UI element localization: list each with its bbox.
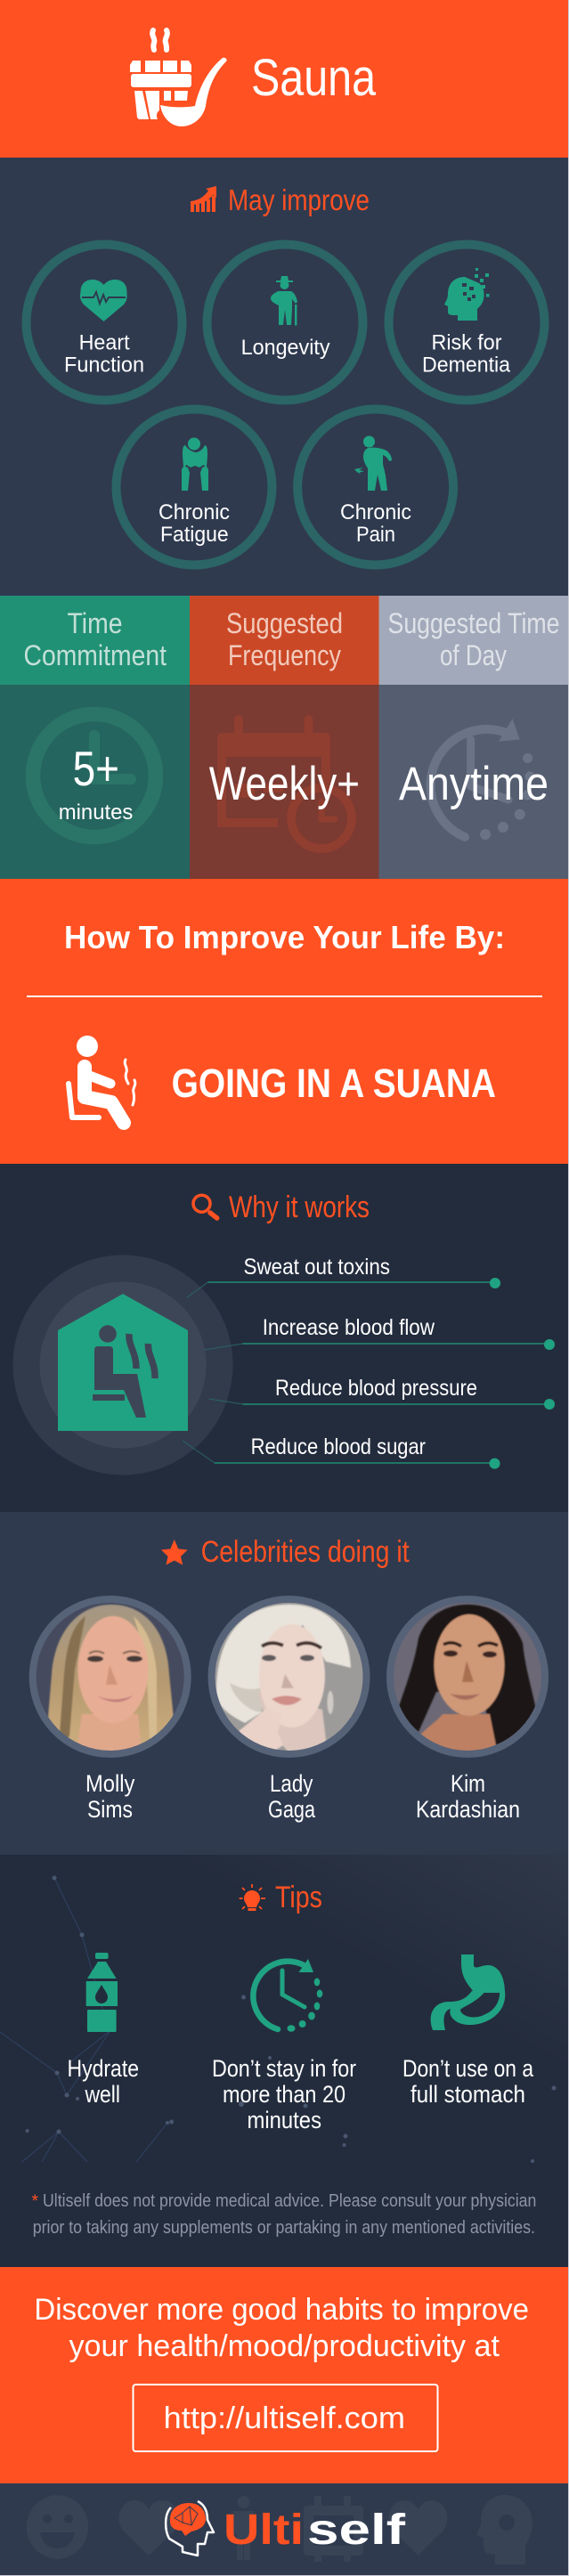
icon: light bulb [240, 1884, 265, 1911]
callout: reduce blood sugar: Reduce blood sugar [251, 1434, 426, 1459]
portrait: kim kardashian [390, 1599, 545, 1759]
panel: footer [0, 2483, 568, 2575]
panel: how to improve [0, 879, 568, 1164]
icon: man in pain [354, 436, 392, 491]
panel: suggested time of day: Anytime [399, 758, 549, 810]
logo: ultiself: Ulti [224, 2507, 304, 2554]
icon: head dissolving [444, 268, 490, 321]
icon: star [161, 1540, 188, 1565]
benefit: heart function: Function [64, 353, 144, 378]
tip: full stomach: full stomach [410, 2081, 525, 2108]
panel: suggested frequency [190, 596, 379, 879]
callout: sweat out toxins: Sweat out toxins [244, 1255, 390, 1280]
benefit: risk for dementia [388, 244, 545, 401]
logo: ultiself [166, 2501, 406, 2556]
panel: time commitment: Time [68, 607, 123, 639]
icon: sauna bucket and ladle [130, 30, 227, 126]
heading: how to improve your life by: How To Improve Your Life By: [64, 919, 505, 955]
heading: may improve: May improve [228, 183, 370, 216]
callout: increase blood flow: Increase blood flow [263, 1315, 435, 1340]
label: lady gaga: Lady [270, 1770, 313, 1797]
label: molly sims: Sims [87, 1796, 133, 1823]
tip: hydrate well: Hydrate [68, 2055, 139, 2082]
benefit: chronic fatigue [116, 410, 272, 565]
panel: header [0, 0, 568, 158]
diagram: sauna house [12, 1255, 233, 1475]
callout: sweat out toxins [187, 1255, 500, 1297]
callout: reduce blood sugar [183, 1434, 500, 1469]
tip: full stomach [402, 1954, 534, 2108]
title: Sauna [251, 49, 377, 107]
panel: suggested time of day: of Day [440, 639, 507, 671]
tip: hydrate well [68, 1953, 139, 2108]
panel: time commitment: minutes [59, 800, 133, 825]
panel: may improve [0, 158, 568, 597]
icon: rising chart [191, 186, 216, 212]
benefit: chronic fatigue: Fatigue [160, 523, 229, 547]
tip: hydrate well: well [85, 2081, 120, 2108]
icon: clock with arrow watermark [430, 719, 534, 840]
disclaimer [32, 2191, 536, 2238]
icon: person sitting in sauna [69, 1036, 135, 1123]
label: kim kardashian: Kardashian [416, 1796, 520, 1823]
tip: time limit [212, 1959, 356, 2133]
benefit: risk for dementia: Risk for [431, 331, 502, 354]
portrait: molly sims [33, 1599, 188, 1763]
button: url [134, 2385, 438, 2451]
icon: old man with cane [271, 276, 297, 326]
panel: suggested time of day [379, 596, 568, 879]
benefit: chronic pain: Pain [356, 523, 395, 547]
panel: time commitment [0, 596, 190, 879]
text: discover more [34, 2293, 529, 2363]
watermark icons [27, 2495, 532, 2564]
heading: celebrities doing it: Celebrities doing it [201, 1535, 410, 1569]
benefit: chronic pain [297, 410, 453, 565]
text: discover more: Discover more good habits to improve [34, 2293, 529, 2327]
icon: calendar watermark [217, 719, 352, 849]
icon: clock watermark [33, 714, 156, 837]
callout: increase blood flow [204, 1315, 555, 1350]
benefit: heart function [27, 244, 182, 401]
icon: clock [253, 1959, 322, 2032]
benefit: risk for dementia: Dementia [422, 353, 511, 378]
tip: time limit: Don’t stay in for [212, 2055, 356, 2082]
panel: suggested frequency: Suggested [226, 607, 343, 639]
tip: full stomach: Don’t use on a [402, 2055, 534, 2082]
text: discover more: your health/mood/productivity at [69, 2329, 500, 2363]
label: lady gaga: Gaga [268, 1796, 316, 1823]
icon: stomach [431, 1954, 505, 2030]
label: molly sims [85, 1770, 135, 1823]
label: kim kardashian: Kim [451, 1770, 485, 1797]
icon: heart [80, 280, 127, 321]
benefit: longevity: Longevity [241, 336, 330, 360]
heading: tips: Tips [275, 1881, 322, 1914]
callout: reduce blood pressure [209, 1376, 555, 1410]
button: url: http://ultiself.com [164, 2401, 405, 2435]
panel: tips [0, 1855, 568, 2267]
icon: water bottle [86, 1953, 118, 2032]
panel: suggested frequency: Frequency [228, 639, 341, 671]
tip: time limit: more than 20 [223, 2081, 345, 2108]
panel: call to action [0, 2267, 568, 2483]
label: lady gaga [268, 1770, 316, 1823]
icon: head with brain [166, 2501, 214, 2556]
heading: why it works: Why it works [229, 1190, 370, 1224]
label: kim kardashian [416, 1770, 520, 1823]
logo: ultiself: self [307, 2507, 406, 2554]
portrait: lady gaga [212, 1599, 367, 1756]
callout: going in a suana: GOING IN A SUANA [172, 1060, 496, 1106]
panel: time commitment: Commitment [23, 639, 167, 671]
benefit: chronic pain: Chronic [340, 500, 411, 524]
panel: suggested frequency: Weekly+ [209, 758, 360, 810]
disclaimer: * [32, 2191, 39, 2211]
benefit: chronic fatigue: Chronic [159, 500, 230, 524]
panel: celebrities [0, 1512, 568, 1855]
label: molly sims: Molly [85, 1770, 135, 1797]
panel: why it works [0, 1164, 568, 1512]
benefit: longevity [207, 244, 363, 401]
panel: time commitment: 5+ [73, 741, 119, 796]
callout: reduce blood pressure: Reduce blood pressure [275, 1376, 477, 1401]
tip: time limit: minutes [248, 2107, 321, 2133]
benefit: heart function: Heart [79, 331, 130, 354]
icon: tired man [182, 438, 208, 491]
icon: magnifying glass [193, 1195, 217, 1218]
